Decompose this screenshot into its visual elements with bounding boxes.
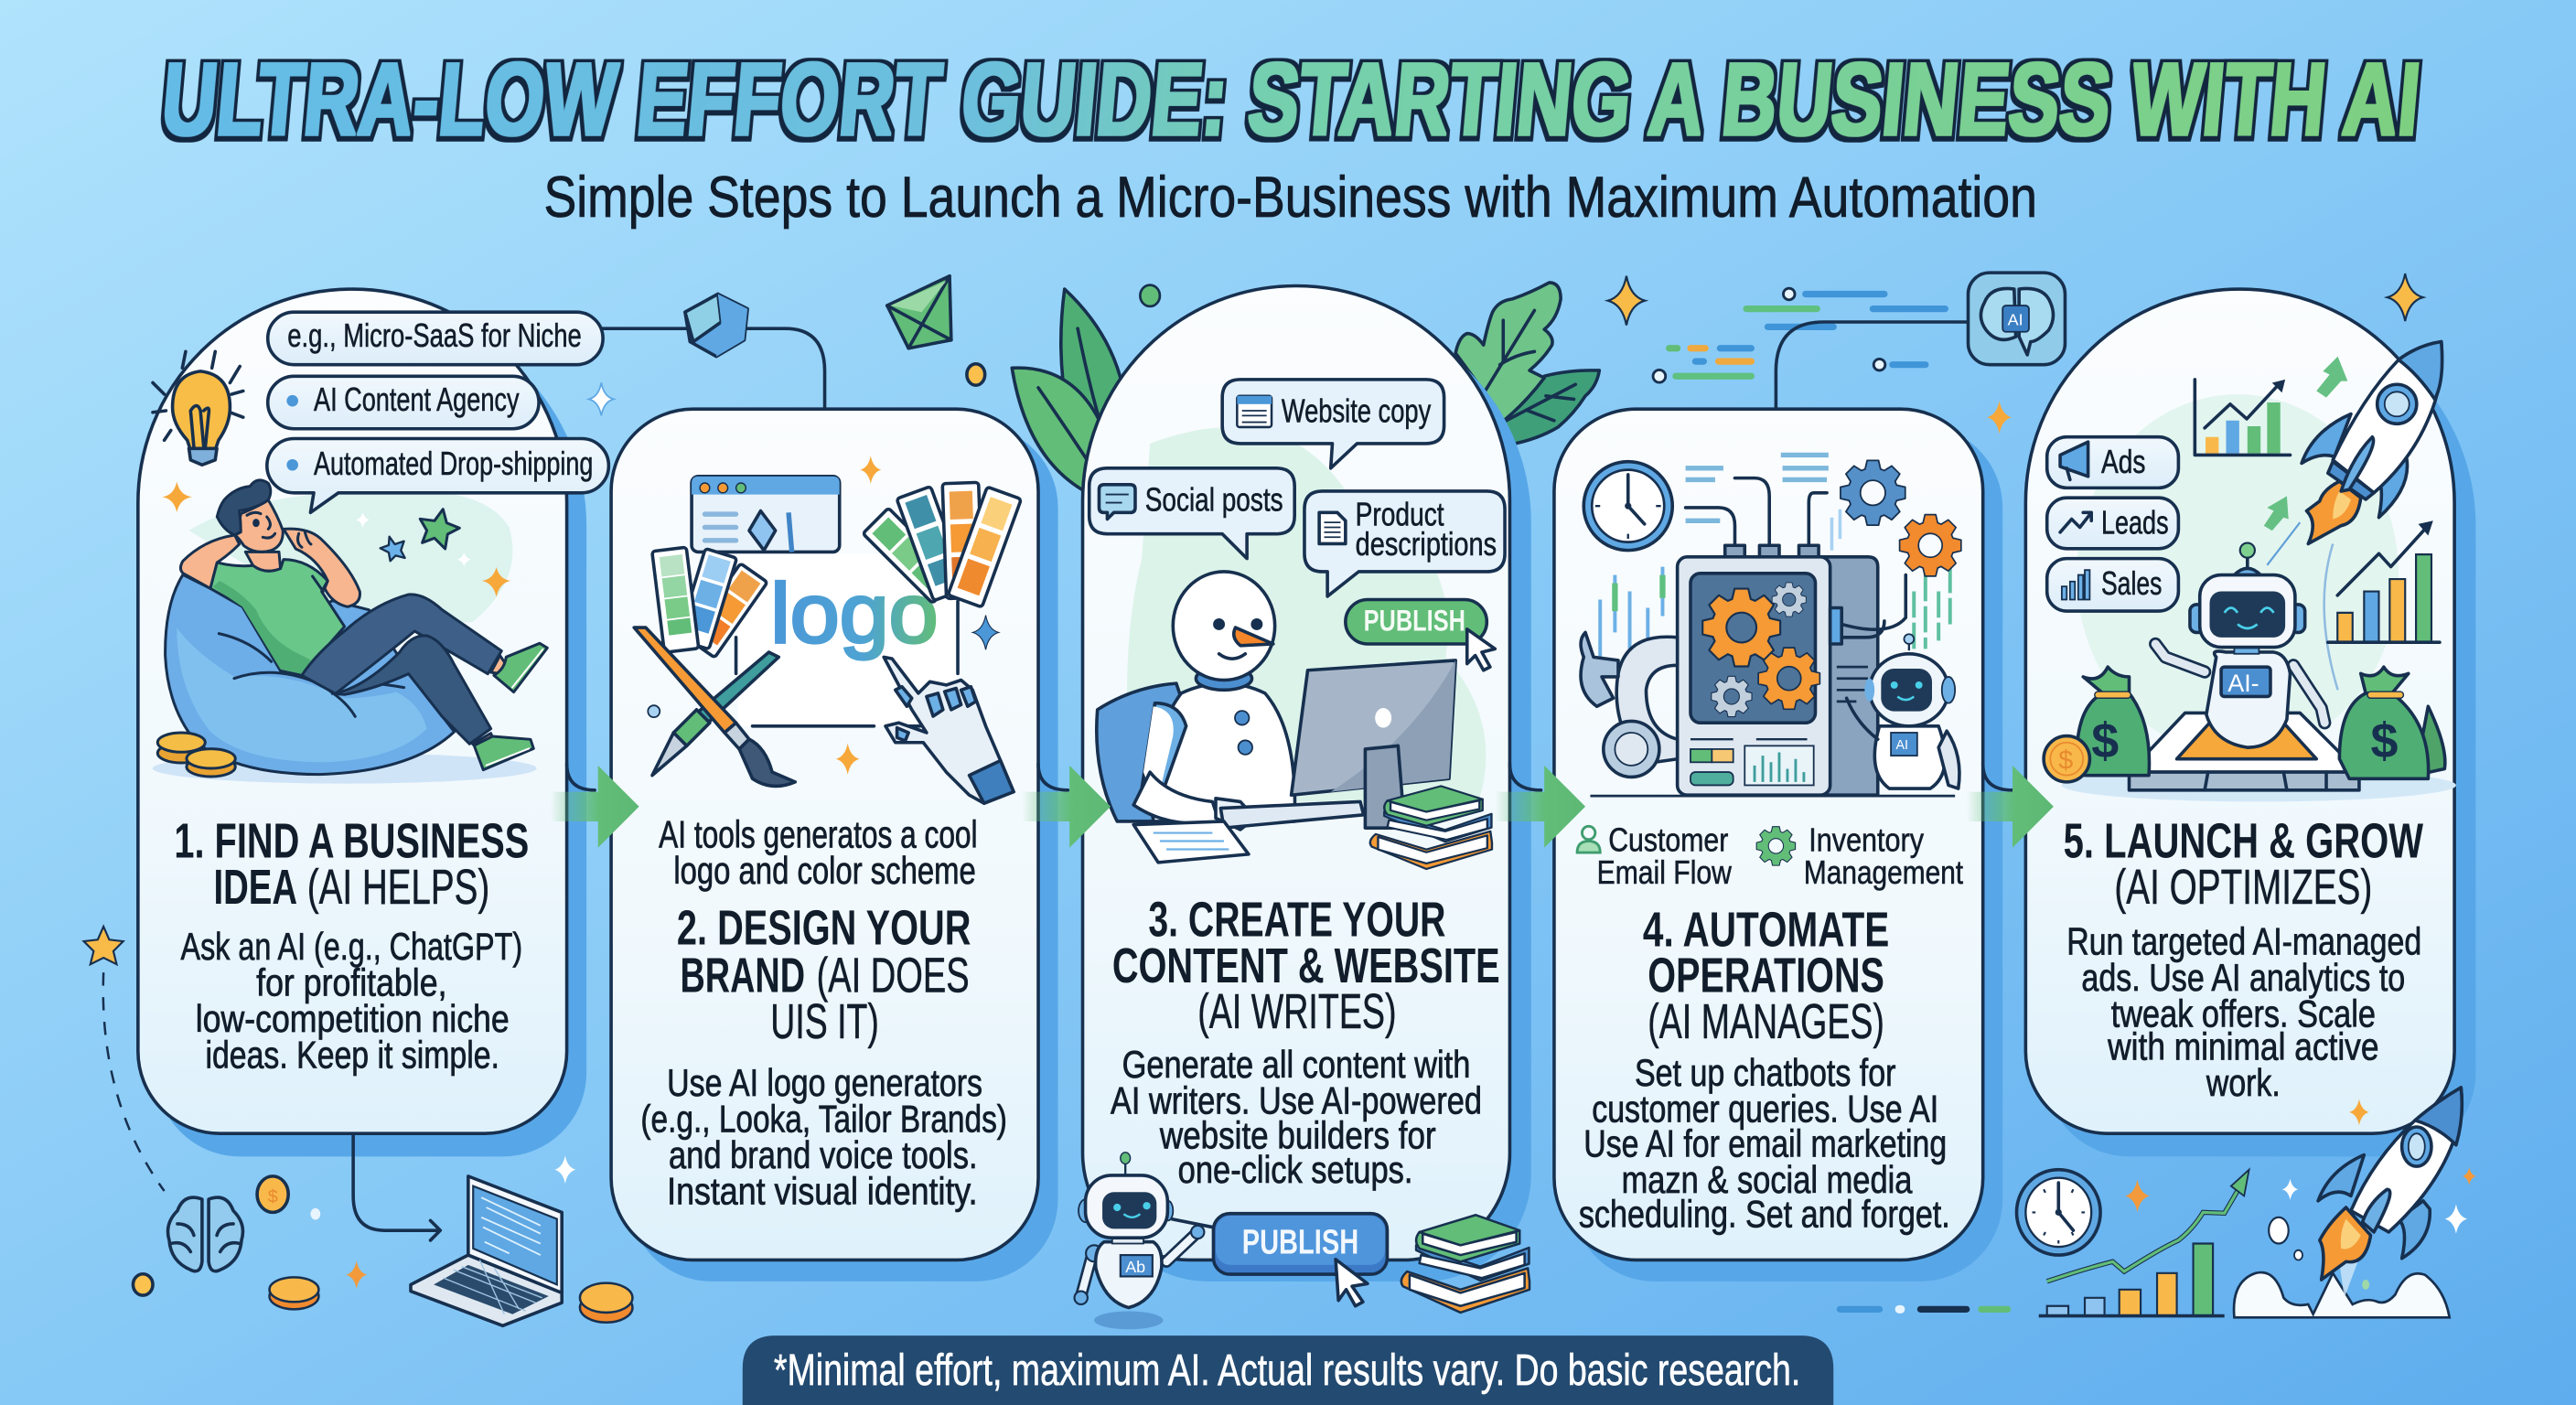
body step 5: tweak offers. Scale [2111,992,2376,1035]
heading step 2: UIS IT) [770,994,879,1049]
body step 2: and brand voice tools. [669,1134,978,1176]
illustration: platform [2130,713,2359,790]
mint glow [2077,394,2399,756]
body step 4: Set up chatbots for [1635,1052,1896,1094]
pill: drop-shipping: Automated Drop-shipping [314,445,593,482]
panel: step 4 automate [1554,409,1983,1260]
shirt [210,560,345,675]
beanbag [166,574,455,775]
head [1173,572,1275,681]
arm behind head [180,535,240,588]
monitor [1292,660,1455,795]
arrows between steps [551,764,2054,848]
legend dashes [1840,1307,2008,1311]
card 5 outline [2025,289,2454,1133]
heading step 3: (AI WRITES) [1197,984,1397,1039]
icon: orange sparkle near card 5 [1987,401,2012,434]
face [235,500,283,552]
arrow to laptop [353,1135,440,1240]
icon: coin upright: $ [268,1187,278,1207]
books on desk [1370,786,1492,869]
body [1153,683,1295,821]
icon: right leaves [1455,283,1599,445]
icon: gold sparkle top [1608,276,1645,326]
illustration: main robot: AI- [2227,670,2259,697]
panel: step 1 find idea [138,289,608,1133]
pill: micro-saas: e.g., Micro-SaaS for Niche [287,316,582,354]
upper leg [302,595,501,693]
pill: micro-saas [268,312,603,365]
illustration: helper robot [1847,634,1959,788]
pill: content agency: AI Content Agency [314,381,520,418]
illustration: logo canvas [736,553,958,726]
icon: color swatches right [863,482,1021,607]
keyboard [1220,801,1364,828]
lower leg [332,636,491,744]
icon: white sparkle [554,1155,575,1184]
body step 3: Generate all content with [1122,1044,1470,1086]
footer bar [743,1335,1833,1405]
chart: rising bars and line [2039,1170,2249,1316]
feature: inventory management: Management [1804,853,1963,891]
heading step 5 [2064,813,2423,915]
icon: left leaves [1012,289,1128,493]
icon: orange star [84,927,123,964]
heading step 1: 1. FIND A BUSINESS [174,813,529,868]
icon: lightbulb [153,351,243,465]
icon: white sparkle [589,382,614,415]
footer bar: *Minimal effort, maximum AI. Actual results vary. Do basic research. [774,1346,1800,1395]
body step 4: scheduling. Set and forget. [1579,1194,1950,1236]
socks [491,656,506,674]
illustration: browser window [692,477,840,552]
body step 1 [181,926,522,1076]
illustration: money bags: $ [2091,713,2119,768]
body step 1: low-competition niche [196,998,510,1040]
heading step 2: 2. DESIGN YOUR [677,901,971,956]
decorative icons behind cards [589,273,2423,493]
callout: website copy: Website copy [1282,392,1431,430]
body step 1: ideas. Keep it simple. [205,1034,499,1076]
icon: connector card 4 to brain [1776,322,1971,411]
icon: sparkles step 2 [648,456,999,775]
illustration: helper robot: AI [1895,738,1908,753]
illustration: money bags [2044,667,2445,782]
icon: green dot [1140,285,1160,306]
feature: customer email flow [1577,820,1733,891]
card 4 outline [1554,409,1983,1260]
panel: step 5 launch [2025,289,2456,1133]
mint glow [1127,427,1486,801]
heading step 2: BRAND [681,949,805,1003]
bottom left decorations [84,927,632,1325]
icon: green arrows [2264,357,2347,531]
pill: ads: Ads [2101,443,2145,480]
heading step 2 [677,901,971,1049]
card 3 outline [1083,285,1509,1260]
icon: robot hand [884,657,1014,803]
body step 3: AI writers. Use AI-powered [1111,1080,1482,1122]
body step 2: Instant visual identity. [667,1170,978,1212]
illustration: snowman at desk [1097,572,1492,869]
heading step 1 [174,813,529,915]
bottom right decorations [1840,1088,2476,1317]
body step 3: one-click setups. [1178,1149,1412,1191]
pill: leads [2047,498,2178,549]
callout: idea pills [267,312,608,512]
illustration: main robot [2155,543,2324,747]
illustration: clock [1583,462,1672,551]
heading step 3: CONTENT & WEBSITE [1112,938,1500,993]
pill: ads [2047,437,2178,488]
heading step 5: 5. LAUNCH & GROW [2064,813,2423,868]
icon: cursor [1336,1260,1368,1306]
feature: inventory management [1756,820,1963,891]
arm right [284,529,360,606]
body step 1: for profitable, [256,961,446,1003]
panel: step 2 design brand [611,409,1038,1260]
icon: green gem [887,276,951,349]
pill: sales [2047,559,2178,611]
body step 2 [640,1062,1007,1212]
icon: color swatches left [652,547,767,658]
icon: cloud [2234,1272,2450,1317]
illustration: money bags: $ [2058,745,2073,775]
lead-in text step 2: logo and color scheme [673,850,976,892]
body step 4 [1579,1052,1950,1236]
icon: book stack [1401,1215,1530,1313]
callout: product descriptions: descriptions [1356,525,1497,563]
stars [162,482,192,512]
robot: Ab [1125,1258,1145,1276]
callout: website copy [1222,380,1444,468]
icon: big rocket [2267,342,2442,690]
subtitle: Simple Steps to Launch a Micro-Business with Maximum Automation [543,166,2037,230]
arrow 3 to 4 [1495,764,1585,848]
robot with publish button [1075,1153,1530,1329]
arm [1133,772,1219,823]
icon: AI brain badge [1969,273,2065,365]
callout: social posts: Social posts [1145,481,1283,519]
icon: loose gears [1841,460,1961,576]
button: publish blue [1213,1214,1387,1274]
icon: yellow dot [133,1274,153,1295]
shoes [494,643,547,692]
arrow 4 to 5 [1967,764,2054,848]
floor shadow [2062,768,2456,801]
button: publish green [1346,600,1495,670]
icon: coin [270,1277,318,1309]
illustration: robot arm [1581,632,1678,777]
heading step 1: (AI HELPS) [307,860,489,915]
heading step 5: (AI OPTIMIZES) [2114,860,2372,915]
pill: leads: Leads [2101,504,2169,542]
pill: content agency [268,376,539,429]
heading step 4: OPERATIONS [1648,949,1884,1003]
arrow 2 to 3 [1022,764,1111,848]
floor line [1590,795,1955,797]
robot [1075,1153,1212,1329]
icon: blue cube [685,294,747,357]
panel: step 3 create content [1083,285,1509,1260]
chair [1097,683,1189,821]
chart: small growth [2195,380,2291,455]
body step 5: with minimal active [2107,1025,2378,1067]
lead-in text step 2: AI tools generatos a cool [659,814,978,856]
icon: coin right [580,1283,632,1323]
pill: sales: Sales [2101,564,2162,602]
heading step 4: (AI MANAGES) [1648,994,1884,1049]
heading step 2: (AI DOES [817,949,970,1003]
feature: inventory management: Inventory [1809,820,1924,858]
callout: product descriptions [1304,491,1505,596]
heading step 3: 3. CREATE YOUR [1148,893,1445,948]
illustration: machine [1600,545,1950,795]
icon: crossed brush and pencil [634,627,795,786]
body step 5: ads. Use AI analytics to [2081,957,2405,999]
card 2 outline [611,409,1038,1260]
illustration: logo canvas: logo [770,567,938,660]
body step 5: Run targeted AI-managed [2066,920,2421,962]
icon: brain [168,1197,242,1271]
icon: data dashes [1653,288,1945,382]
icon: sparkle orange [2125,1179,2150,1212]
neck [245,552,281,571]
icon: small clock [2016,1170,2100,1255]
chart: growth bars [2328,520,2440,642]
icon: yellow dot [967,364,985,385]
icon: sparkles and bubbles [2269,1167,2476,1290]
heading step 4: 4. AUTOMATE [1643,902,1889,957]
body step 2: Use AI logo generators [667,1062,982,1104]
illustration: money bags: $ [2371,713,2399,768]
feature: customer email flow: Customer [1608,820,1728,858]
icon: laptop [411,1176,562,1325]
illustration: person on beanbag [153,480,547,784]
illustration: wires [1686,455,1840,552]
heading step 3 [1112,893,1500,1039]
icon: coin upright [257,1176,288,1212]
feature: customer email flow: Email Flow [1597,853,1733,891]
button: publish blue: PUBLISH [1242,1222,1358,1260]
icon: small rocket [2318,1088,2462,1298]
heading step 4 [1643,902,1889,1049]
lead-in text step 2 [659,814,978,892]
body step 3 [1111,1044,1482,1191]
body step 3: website builders for [1159,1114,1436,1156]
body step 4: customer queries. Use AI [1592,1089,1938,1131]
body step 5: work. [2206,1062,2281,1104]
card 1 outline [138,289,567,1133]
arrow 1 to 2 [551,764,639,848]
body step 4: mazn & social media [1622,1159,1912,1201]
icon: white dot [310,1208,320,1219]
icon: sparkle orange [346,1260,367,1289]
body step 1: Ask an AI (e.g., ChatGPT) [181,926,522,968]
callout: social posts [1089,468,1294,559]
body step 5 [2066,920,2421,1104]
dashed path [103,972,165,1191]
coins [157,744,205,763]
panel shadows [156,307,2475,1282]
callout: product descriptions: Product [1356,496,1444,533]
pill: drop-shipping [267,439,608,512]
icon: gold sparkle right top [2388,273,2423,321]
icon: connector card 1 to card 2 [600,328,825,411]
icon: sparkle [2349,1099,2369,1125]
body step 2: (e.g., Looka, Tailor Brands) [640,1098,1007,1140]
button: publish green: PUBLISH [1364,605,1465,638]
heading step 1: IDEA [213,860,297,915]
paper [1133,821,1249,863]
icon: AI brain badge: AI [2008,311,2023,329]
body step 4: Use AI for email marketing [1583,1122,1947,1164]
